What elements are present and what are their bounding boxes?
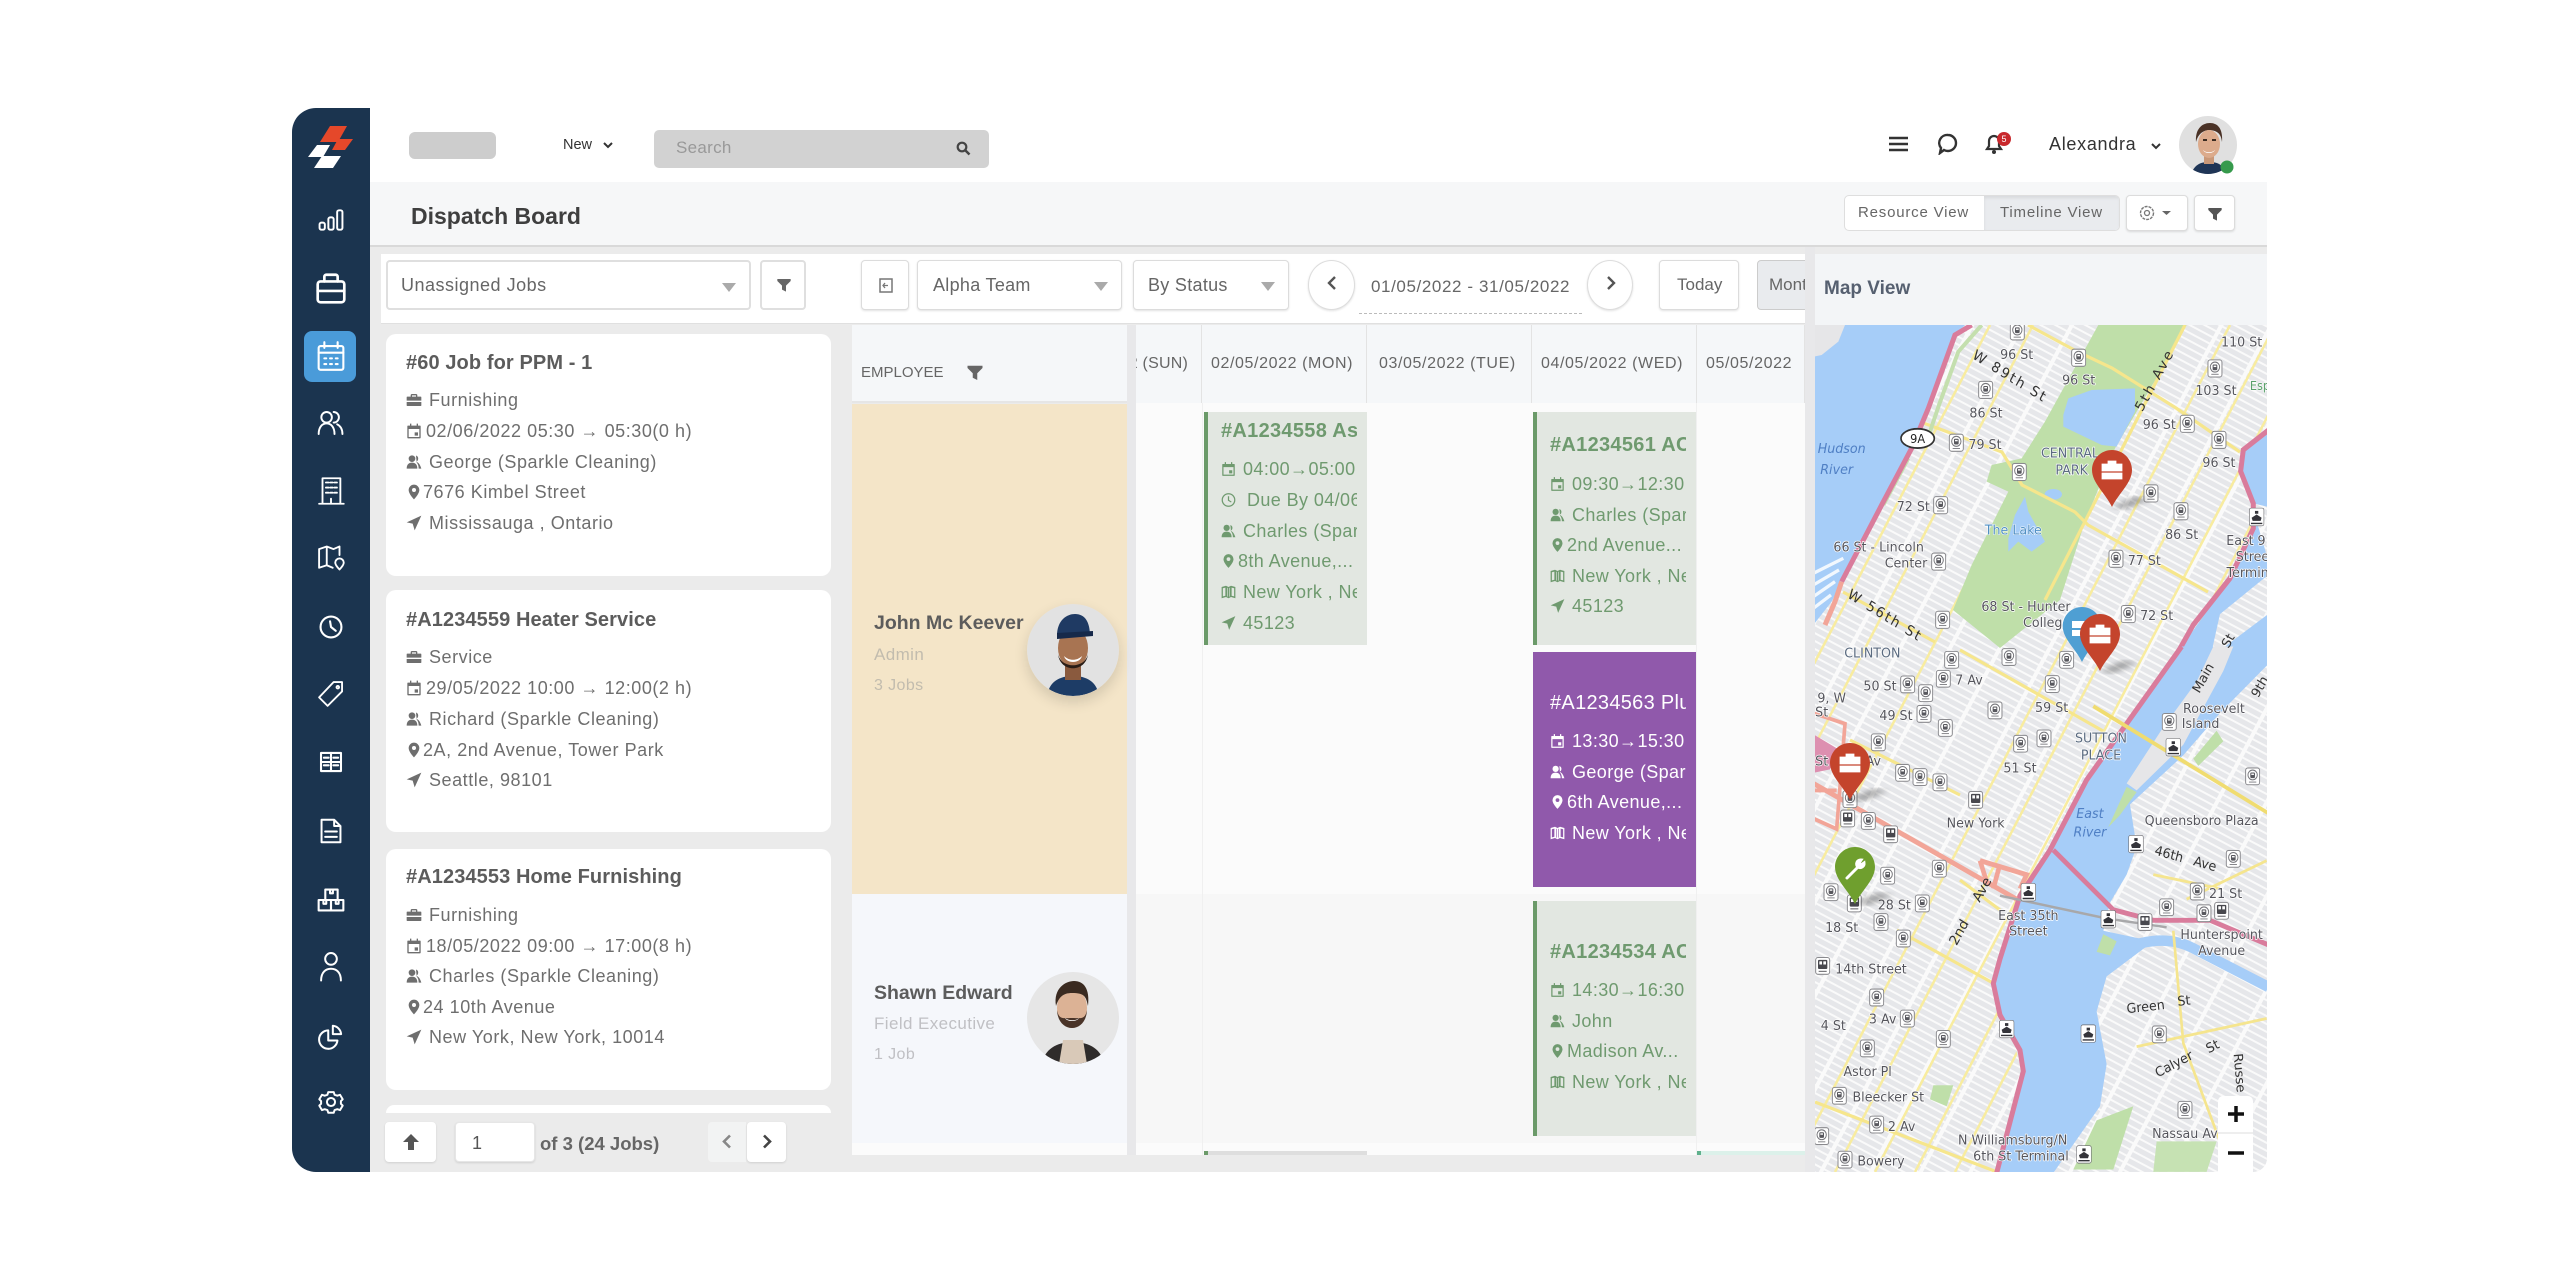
map labels upper: 110 St bbox=[2221, 335, 2262, 351]
date header: Monday bbox=[1202, 325, 1367, 403]
gutter bbox=[1805, 247, 1815, 1172]
icon: user bbox=[321, 953, 341, 980]
unassigned select: Unassigned Jobs bbox=[401, 275, 547, 295]
job block: #A1234563: 6th Avenue,... bbox=[1567, 792, 1682, 812]
column divider bbox=[1127, 325, 1136, 1155]
map labels upper: Center bbox=[1885, 556, 1928, 572]
panel: timeline toolbar bbox=[852, 254, 1805, 324]
view toggle bbox=[1844, 195, 2120, 231]
map labels lower: SUTTON bbox=[2075, 731, 2127, 747]
job block: #A1234561: 45123 bbox=[1572, 596, 1624, 616]
job block: #A1234534 bbox=[1533, 901, 1696, 1136]
search box bbox=[654, 130, 989, 168]
previous page bbox=[708, 1122, 746, 1162]
job block: #A1234561: 2nd Avenue... bbox=[1567, 535, 1682, 555]
page title: Dispatch Board bbox=[411, 203, 581, 229]
map labels upper: PARK bbox=[2055, 463, 2088, 479]
map labels lower: New York bbox=[1947, 816, 2005, 832]
map labels lower: N Williamsburg/N bbox=[1958, 1133, 2067, 1149]
map labels lower: Bowery bbox=[1857, 1154, 1905, 1170]
job card: #A1234553: Furnishing bbox=[429, 905, 519, 925]
FDR drive north bbox=[2178, 430, 2268, 652]
Henry Hudson Parkway bbox=[1842, 325, 1972, 582]
map bbox=[1815, 325, 2267, 1172]
job card: #A1234559: 29/05/2022 10:00 → 12:00(2 h) bbox=[426, 678, 692, 698]
chat icon bbox=[1938, 134, 1958, 155]
map labels upper: 5th Ave bbox=[2132, 346, 2178, 414]
job block: #A1234561 bbox=[1533, 412, 1696, 645]
the reservoir bbox=[2063, 388, 2135, 447]
piers bbox=[1813, 558, 1843, 608]
map labels upper: W 89th St bbox=[1970, 347, 2050, 406]
date header: Thursday: 05/05/2022 bbox=[1706, 355, 1792, 372]
top bar bbox=[292, 108, 2267, 182]
map labels upper: CLINTON bbox=[1844, 646, 1900, 662]
east river channel bbox=[2178, 521, 2268, 652]
pin: job Upper East Side bbox=[2092, 450, 2150, 509]
previous month bbox=[1308, 260, 1355, 310]
pin: green service bbox=[1835, 847, 1893, 905]
map labels upper: 96 St bbox=[2000, 347, 2033, 363]
hamburger menu bbox=[1889, 136, 1908, 152]
map labels lower: 14th Street bbox=[1835, 962, 1907, 977]
row 3 background bbox=[1136, 1143, 1805, 1155]
ferry stops bbox=[1999, 738, 2181, 1163]
job block: #A1234558 bbox=[1204, 412, 1367, 645]
east river north bbox=[2178, 430, 2268, 652]
avatar: John bbox=[1027, 604, 1119, 696]
notification bell bbox=[1985, 132, 2011, 154]
map labels lower: Street bbox=[2009, 924, 2048, 940]
map labels upper: 86 St bbox=[2165, 528, 2198, 543]
zoom controls bbox=[2218, 1096, 2253, 1176]
map labels lower: East bbox=[2076, 807, 2105, 822]
map labels lower: 7 Av bbox=[1955, 673, 1983, 689]
map labels lower: 59 St bbox=[2035, 700, 2068, 716]
map labels lower: Av bbox=[1866, 754, 1881, 770]
map labels lower: St bbox=[2204, 1037, 2222, 1057]
map labels upper: College bbox=[2023, 616, 2070, 631]
job card: #60: #60 Job for PPM - 1 bbox=[406, 352, 592, 374]
New chevron bbox=[603, 142, 613, 148]
map labels lower: Hunterspoint bbox=[2180, 928, 2263, 943]
column grid lines bbox=[1202, 403, 1697, 1155]
map labels upper: 86 St bbox=[1969, 406, 2003, 422]
job sliver: mint bbox=[1697, 1151, 1805, 1155]
map labels lower: Green bbox=[2126, 998, 2166, 1017]
date header: Monday: 02/05/2022 (MON) bbox=[1211, 355, 1353, 372]
role: Field Executive bbox=[874, 1014, 995, 1033]
job block: #A1234558: 45123 bbox=[1243, 613, 1295, 633]
highway end bbox=[1825, 582, 1842, 625]
rail bridge bbox=[2000, 896, 2167, 927]
west side land corner bbox=[1813, 325, 1845, 357]
job count: 1 Job bbox=[874, 1046, 915, 1063]
land with street grid bbox=[1815, 325, 2267, 1172]
job block: #A1234534: Madison Av... bbox=[1567, 1041, 1679, 1061]
map labels upper: 96 St bbox=[2143, 418, 2176, 433]
map labels upper: St bbox=[2219, 631, 2238, 651]
page input bbox=[455, 1122, 535, 1162]
unassigned filter button bbox=[760, 260, 806, 310]
map labels upper: 103 St bbox=[2195, 384, 2237, 399]
job card: #60: Furnishing bbox=[429, 390, 519, 410]
Brooklyn park bbox=[1930, 1085, 1953, 1106]
logo bbox=[308, 126, 353, 168]
header band bbox=[370, 182, 2267, 247]
job card: #60: Mississauga , Ontario bbox=[429, 513, 614, 533]
date header: Wednesday: 04/05/2022 (WED) bbox=[1541, 355, 1683, 372]
map labels lower: 2nd bbox=[1946, 917, 1973, 948]
job card: #A1234553: 18/05/2022 09:00 → 17:00(8 h) bbox=[426, 936, 692, 956]
map labels upper: 68 St - Hunter bbox=[1981, 599, 2071, 615]
icon: employee filter bbox=[968, 366, 982, 380]
map labels upper: 79 St bbox=[1968, 437, 2002, 453]
job block: #A1234534: 14:30→16:30 bbox=[1572, 980, 1684, 1000]
icon: building bbox=[319, 478, 344, 504]
icon: team bbox=[319, 412, 342, 434]
sidebar bbox=[292, 108, 370, 1172]
row 2 background bbox=[1136, 894, 1805, 1143]
pagination bbox=[384, 1122, 786, 1164]
map labels lower: 28 St bbox=[1878, 898, 1911, 913]
job sliver: gray bbox=[1204, 1151, 1367, 1155]
map labels lower: 6th St Terminal bbox=[1973, 1149, 2069, 1165]
Queensboro Bridge bbox=[2093, 706, 2268, 813]
employee: John Mc Keever bbox=[852, 404, 1127, 894]
employee column header: EMPLOYEE bbox=[861, 364, 944, 381]
date underline bbox=[1359, 313, 1582, 314]
today button: Today bbox=[1677, 275, 1722, 294]
Roosevelt Island bbox=[2127, 646, 2233, 790]
today button bbox=[1659, 260, 1739, 310]
name: Shawn Edward bbox=[874, 982, 1013, 1004]
map labels upper: 96 St bbox=[2062, 373, 2095, 389]
scroll up button bbox=[385, 1122, 436, 1162]
top bar placeholder logo bbox=[409, 132, 496, 159]
fifth avenue bbox=[2045, 325, 2185, 600]
map labels lower: 9, W bbox=[1817, 691, 1846, 706]
status select bbox=[1133, 260, 1289, 310]
map labels lower: 49 St bbox=[1879, 709, 1913, 724]
interchange bbox=[1813, 734, 1837, 773]
date header: Wednesday bbox=[1532, 325, 1697, 403]
next month bbox=[1587, 260, 1633, 310]
pin: red job midtown bbox=[2080, 614, 2138, 673]
job count: 3 Jobs bbox=[874, 677, 924, 694]
map labels lower: PLACE bbox=[2081, 748, 2121, 764]
transit stops upper bbox=[1932, 323, 2264, 628]
transit stops lower bbox=[1815, 649, 2260, 1168]
user name: Alexandra bbox=[2049, 134, 2136, 154]
map labels upper: River bbox=[1820, 462, 1855, 478]
avenues bbox=[1815, 325, 2267, 1172]
FDR drive bbox=[1993, 646, 2182, 1173]
job block: #A1234561: 09:30→12:30 bbox=[1572, 474, 1684, 494]
icon: settings bbox=[319, 1092, 343, 1113]
date header: Sunday bbox=[1136, 325, 1202, 403]
next page bbox=[747, 1122, 786, 1162]
date range: 01/05/2022 - 31/05/2022 bbox=[1371, 277, 1570, 296]
icon: clock bbox=[321, 617, 341, 637]
map view header bbox=[1815, 254, 2267, 325]
job card: #A1234559: Richard (Sparkle Cleaning) bbox=[429, 709, 659, 729]
job block: #A1234558: 8th Avenue,... bbox=[1238, 551, 1353, 571]
map labels lower: Bleecker St bbox=[1853, 1090, 1924, 1106]
job card: #A1234553: Charles (Sparkle Cleaning) bbox=[429, 966, 659, 986]
icon: quote grid bbox=[321, 753, 341, 771]
island park bbox=[2108, 787, 2137, 827]
icon: analytics bbox=[320, 210, 342, 230]
job block: #A1234563: 13:30→15:30 bbox=[1572, 731, 1684, 751]
job card: #A1234559: #A1234559 Heater Service bbox=[406, 609, 656, 631]
map labels upper: W 56th St bbox=[1845, 586, 1925, 646]
map labels lower: 50 St bbox=[1863, 679, 1897, 695]
East River bbox=[1813, 646, 2268, 1173]
job block: #A1234558: 04:00→05:00 bbox=[1243, 459, 1356, 479]
job card: partially visible bbox=[386, 1105, 831, 1113]
search placeholder: Search bbox=[676, 138, 732, 157]
turtle pond bbox=[2045, 489, 2062, 500]
map labels lower: 21 St bbox=[2209, 887, 2242, 902]
map labels lower: St bbox=[1815, 754, 1828, 770]
map labels lower: 3 Av bbox=[1869, 1012, 1897, 1028]
map labels lower: Nassau Av bbox=[2152, 1127, 2218, 1142]
job card: #60: 7676 Kimbel Street bbox=[423, 482, 586, 502]
map labels lower: Avenue bbox=[2198, 944, 2245, 959]
job card: #A1234559 bbox=[386, 590, 831, 832]
job card: #A1234559: 2A, 2nd Avenue, Tower Park bbox=[423, 740, 664, 760]
Hudson River bbox=[1813, 325, 1982, 625]
row 3 employee stub bbox=[852, 1143, 1127, 1155]
New menu: New bbox=[563, 137, 592, 153]
map labels lower: Astor Pl bbox=[1843, 1065, 1892, 1080]
sidebar icons bbox=[316, 209, 346, 1114]
map labels lower: Ave bbox=[1970, 875, 1995, 905]
date header: Thursday bbox=[1697, 325, 1805, 403]
job card: #A1234553 bbox=[386, 849, 831, 1090]
map labels lower: Calyer bbox=[2153, 1048, 2196, 1081]
avatar: Alexandra bbox=[2179, 116, 2237, 174]
map labels lower: St bbox=[2177, 993, 2191, 1010]
map labels lower: Roosevelt bbox=[2183, 702, 2245, 717]
icon: reports pie bbox=[319, 1026, 341, 1049]
map labels lower: 4 St bbox=[1821, 1019, 1846, 1034]
job card: #60 bbox=[386, 334, 831, 576]
timeline view tab: Timeline View bbox=[2000, 204, 2103, 221]
hudson park strip bbox=[1883, 325, 1982, 505]
map labels upper: The Lake bbox=[1984, 523, 2042, 539]
employee column header bbox=[852, 325, 1127, 403]
map labels upper: 72 St bbox=[2140, 608, 2173, 624]
date header: Tuesday bbox=[1367, 325, 1532, 403]
map labels lower: 46th bbox=[2153, 843, 2185, 866]
icon: document bbox=[322, 820, 340, 842]
route shield 9A bbox=[1901, 429, 1934, 448]
resource view tab: Resource View bbox=[1858, 204, 1969, 221]
job card: #A1234553: #A1234553 Home Furnishing bbox=[406, 866, 682, 888]
page count: of 3 (24 Jobs) bbox=[540, 1133, 659, 1154]
month toggle bbox=[1757, 260, 1817, 310]
icon: map pin bbox=[319, 547, 344, 569]
Queens avenues bbox=[2137, 861, 2267, 1141]
avatar: Shawn bbox=[1027, 972, 1119, 1064]
route shield 9A: 9A bbox=[1910, 432, 1925, 446]
map labels lower: Queensboro Plaza bbox=[2145, 814, 2259, 829]
page input: 1 bbox=[472, 1133, 482, 1153]
job card: #A1234553: 24 10th Avenue bbox=[423, 997, 556, 1017]
map labels lower: 18 St bbox=[1825, 921, 1858, 936]
job card: #A1234553: New York, New York, 10014 bbox=[429, 1027, 665, 1047]
job card: #A1234559: Seattle, 98101 bbox=[429, 770, 553, 790]
map labels lower bbox=[1815, 649, 2272, 1170]
map labels upper: Hudson bbox=[1818, 442, 1866, 457]
back button bbox=[861, 260, 909, 310]
Newtown Creek bbox=[2108, 941, 2268, 987]
header filter button bbox=[2194, 195, 2235, 231]
timeline view tab bbox=[1984, 196, 2120, 230]
map labels lower: Ave bbox=[2192, 854, 2218, 875]
map labels lower: River bbox=[2074, 825, 2108, 840]
map labels upper: 77 St bbox=[2128, 553, 2161, 569]
icon: calendar bbox=[319, 342, 343, 370]
map labels upper: 66 St - Lincoln bbox=[1833, 540, 1924, 556]
date header: Tuesday: 03/05/2022 (TUE) bbox=[1379, 355, 1516, 372]
map labels lower: Island bbox=[2182, 717, 2219, 732]
user chevron bbox=[2151, 143, 2161, 150]
job card: #60: 02/06/2022 05:30 → 05:30(0 h) bbox=[426, 421, 692, 441]
role: Admin bbox=[874, 645, 924, 664]
app frame background bbox=[292, 108, 2267, 1172]
pin: red job tunnel bbox=[1830, 743, 1888, 801]
search icon bbox=[956, 142, 970, 156]
map view header: Map View bbox=[1824, 278, 1910, 299]
row 1 background bbox=[1136, 403, 1805, 894]
map labels lower: 51 St bbox=[2003, 761, 2037, 777]
team select bbox=[917, 260, 1122, 310]
cross-town roads bbox=[1815, 325, 2240, 1172]
Midtown tunnel approach bbox=[1813, 783, 2027, 899]
map labels lower: Main bbox=[2190, 661, 2218, 696]
job block: #A1234534: John bbox=[1572, 1011, 1613, 1031]
map labels lower: 2 Av bbox=[1888, 1120, 1916, 1135]
Queens-Midtown Expressway bbox=[2053, 850, 2268, 945]
name: John Mc Keever bbox=[874, 612, 1024, 634]
map labels upper: CENTRAL bbox=[2041, 446, 2100, 462]
job card: #A1234559: Service bbox=[429, 647, 493, 667]
unassigned select bbox=[386, 260, 751, 310]
status select: By Status bbox=[1148, 275, 1228, 295]
notification bell: 5 bbox=[2001, 134, 2007, 144]
Lincoln tunnel approach bbox=[1813, 713, 1845, 829]
pin: blue job bbox=[2063, 607, 2101, 662]
map labels upper bbox=[1818, 323, 2280, 662]
icon: tag bbox=[319, 682, 342, 706]
icon: inventory boxes bbox=[319, 890, 343, 910]
panel: unassigned toolbar bbox=[381, 254, 852, 324]
settings dropdown bbox=[2126, 195, 2188, 231]
icon: jobs briefcase bbox=[318, 275, 344, 302]
map labels upper: 96 St bbox=[2202, 456, 2236, 471]
the lake bbox=[2008, 497, 2045, 552]
map labels lower: St bbox=[1815, 705, 1828, 720]
team select: Alpha Team bbox=[933, 275, 1031, 295]
map labels lower: Russe bbox=[2230, 1053, 2248, 1093]
map labels lower: East 35th bbox=[1998, 909, 2059, 924]
map labels upper: 72 St bbox=[1897, 500, 1930, 515]
job block: #A1234563 bbox=[1533, 652, 1696, 887]
active menu highlight bbox=[304, 331, 356, 382]
Central Park bbox=[1953, 325, 2187, 648]
job card: #60: George (Sparkle Cleaning) bbox=[429, 452, 657, 472]
employee: Shawn Edward bbox=[852, 894, 1127, 1143]
